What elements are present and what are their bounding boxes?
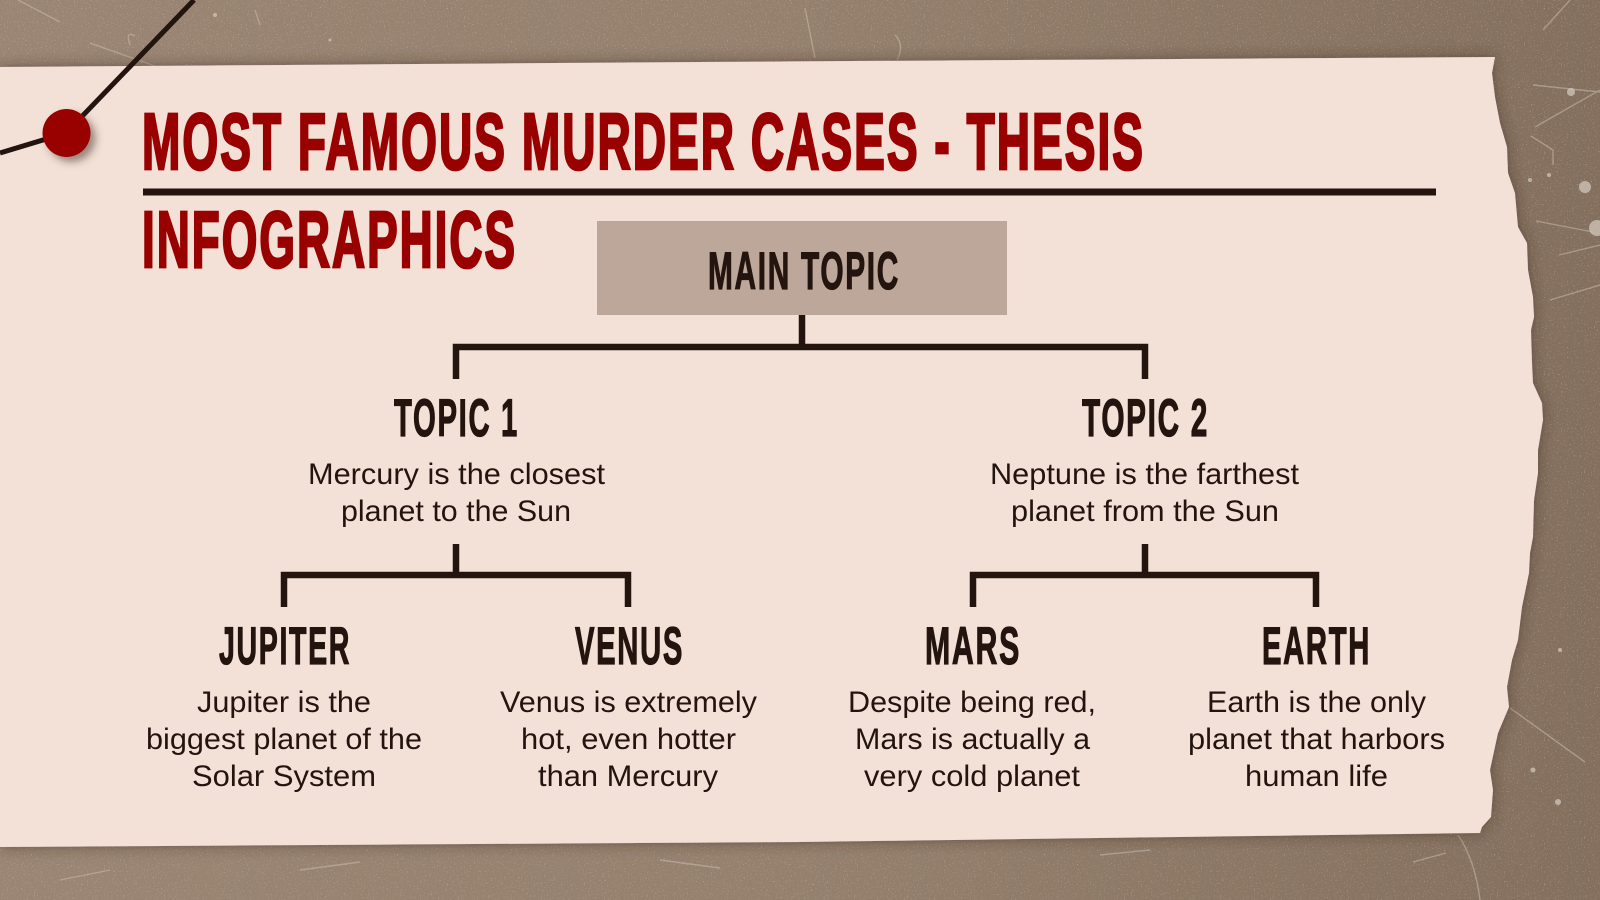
connector: topic 2 to children	[973, 544, 1316, 607]
title: INFOGRAPHICS	[142, 195, 517, 284]
title	[142, 97, 1145, 284]
mars: Mars is actually a	[855, 723, 1090, 756]
jupiter: biggest planet of the	[146, 723, 422, 756]
venus: Venus is extremely	[500, 686, 757, 719]
topic 2	[990, 389, 1300, 528]
jupiter: Jupiter is the	[197, 686, 371, 719]
main topic box: MAIN TOPIC	[708, 242, 900, 301]
topic 1: Mercury is the closest	[308, 458, 606, 491]
jupiter: JUPITER	[219, 617, 351, 676]
string	[0, 0, 194, 153]
venus: hot, even hotter	[521, 723, 736, 756]
jupiter: Solar System	[192, 760, 376, 793]
main topic box	[597, 221, 1007, 315]
jupiter	[146, 617, 422, 793]
mars: MARS	[925, 617, 1021, 676]
topic 2: planet from the Sun	[1011, 495, 1279, 528]
venus: than Mercury	[538, 760, 718, 793]
mars: Despite being red,	[848, 686, 1096, 719]
title rule	[143, 188, 1436, 196]
earth: planet that harbors	[1188, 723, 1445, 756]
earth: EARTH	[1262, 617, 1371, 676]
venus	[500, 617, 757, 793]
mars: very cold planet	[864, 760, 1081, 793]
topic 1: planet to the Sun	[341, 495, 571, 528]
connector: main topic to topics	[456, 315, 1145, 379]
topic 2: Neptune is the farthest	[990, 458, 1300, 491]
venus: VENUS	[575, 617, 684, 676]
mars	[848, 617, 1096, 793]
topic 1: TOPIC 1	[394, 389, 519, 448]
topic 2: TOPIC 2	[1082, 389, 1209, 448]
icon: red pin	[42, 109, 90, 157]
earth: human life	[1245, 760, 1388, 793]
earth: Earth is the only	[1207, 686, 1426, 719]
connector: topic 1 to children	[284, 544, 628, 607]
earth	[1188, 617, 1445, 793]
topic 1	[308, 389, 606, 528]
